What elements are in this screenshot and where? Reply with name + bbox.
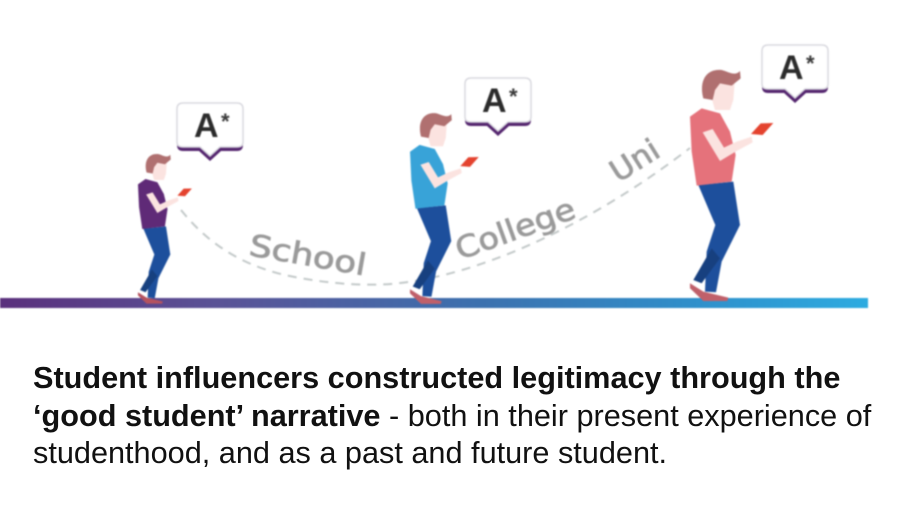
label: School: School: [247, 228, 369, 283]
caption text: Student influencers constructed legitimacy through the: [33, 361, 840, 395]
speech bubble: school: *: [221, 109, 230, 134]
label: College: College: [451, 192, 580, 268]
figure: university student: [690, 70, 773, 301]
speech bubble: college: *: [509, 84, 518, 109]
speech bubble: school: A: [194, 107, 219, 145]
speech bubble: university: [762, 45, 828, 103]
caption text: studenthood, and as a past and future student.: [33, 436, 667, 470]
speech bubble: college: A: [482, 82, 507, 120]
speech bubble: college: [465, 78, 531, 136]
figure: school student: [138, 154, 192, 304]
caption text: ‘good student’ narrative - both in their present experience of: [33, 398, 871, 432]
ground line: [0, 298, 868, 308]
label: Uni: Uni: [604, 133, 666, 190]
speech bubble: school: [177, 103, 243, 161]
dashed path: [181, 148, 690, 285]
figure: college student: [410, 113, 479, 304]
illustration: [0, 44, 869, 309]
speech bubble: university: A: [779, 49, 804, 87]
caption text: [33, 361, 872, 470]
speech bubble: university: *: [806, 51, 815, 76]
